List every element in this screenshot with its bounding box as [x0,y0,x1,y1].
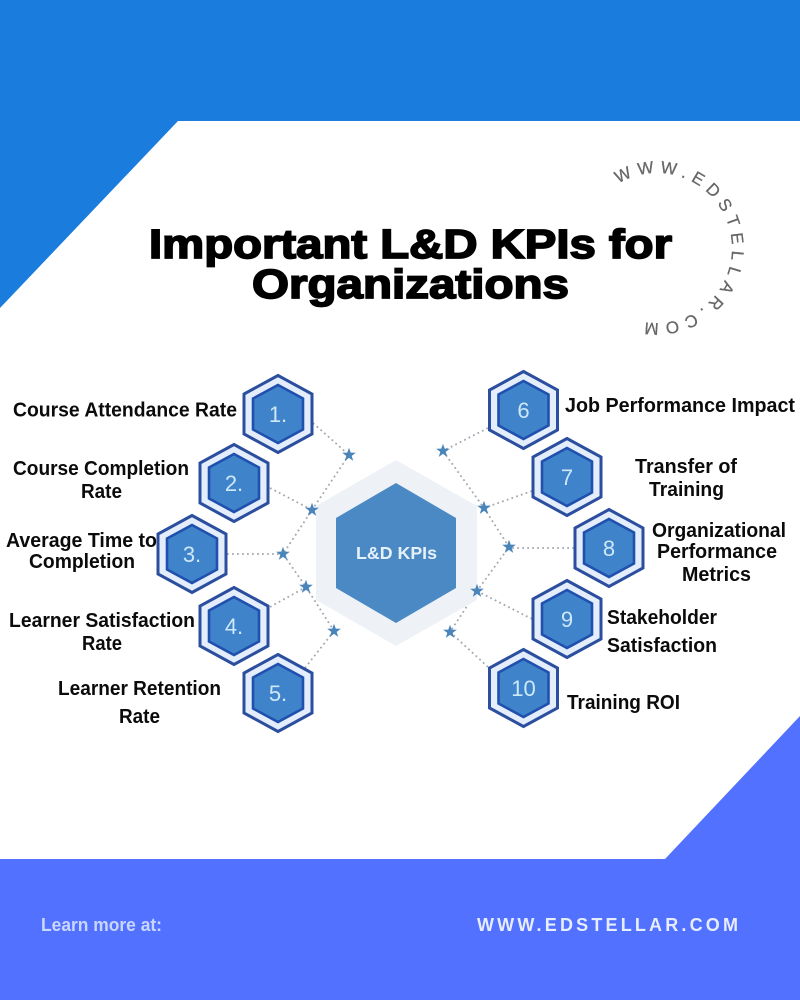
KPI 6: Job Performance Impact: Job Performance Impact [565,395,795,417]
KPI 7: Transfer of Training: Transfer of [635,456,737,478]
central hexagon: L&D KPIs [316,460,477,646]
KPI 7: Transfer of Training: 7 [561,465,573,490]
KPI 4: Learner Satisfaction Rate [9,588,268,664]
star markers [276,444,516,638]
central hexagon: L&D KPIs: L&D KPIs [356,543,437,563]
KPI 9: Stakeholder Satisfaction: 9 [561,607,573,632]
title [149,221,672,307]
KPI 1: Course Attendance Rate: Course Attendance Rate [13,400,237,422]
KPI 1: Course Attendance Rate: 1. [269,402,287,427]
KPI 9: Stakeholder Satisfaction: Satisfaction [607,635,717,657]
KPI 8: Organizational Performance Metrics: Metrics [682,564,751,586]
KPI 10: Training ROI: 10 [511,676,536,701]
KPI 5: Learner Retention Rate: Learner Retention [58,678,221,700]
KPI 8: Organizational Performance Metrics: Performance [657,541,777,563]
footer: website: WWW.EDSTELLAR.COM [477,915,738,935]
KPI 10: Training ROI: Training ROI [567,692,680,714]
circular website text: WWW.EDSTELLAR.COM [613,160,744,336]
KPI 6: Job Performance Impact [490,372,795,448]
KPI 2: Course Completion Rate: Rate [81,481,122,503]
KPI 8: Organizational Performance Metrics: 8 [603,536,615,561]
KPI 4: Learner Satisfaction Rate: Rate [82,633,122,655]
KPI 5: Learner Retention Rate: 5. [269,681,287,706]
footer: learn more: Learn more at: [41,915,162,935]
bottom blue banner [0,716,800,1000]
KPI 3: Average Time to Completion: Average Time to [6,530,157,552]
KPI 8: Organizational Performance Metrics [575,510,786,586]
top blue banner [0,0,800,308]
title: Important L&D KPIs for [149,221,672,267]
KPI 1: Course Attendance Rate [13,376,312,452]
title: Organizations [252,261,569,307]
KPI 3: Average Time to Completion: 3. [183,542,201,567]
KPI 10: Training ROI [490,650,680,726]
KPI 9: Stakeholder Satisfaction [533,580,717,658]
dotted connectors [227,423,574,668]
KPI 3: Average Time to Completion: Completion [29,551,135,573]
KPI 2: Course Completion Rate [13,444,268,522]
KPI 4: Learner Satisfaction Rate: 4. [225,614,243,639]
KPI 6: Job Performance Impact: 6 [517,398,530,423]
KPI 2: Course Completion Rate: 2. [225,471,243,496]
KPI 5: Learner Retention Rate [58,654,312,732]
KPI 5: Learner Retention Rate: Rate [119,706,160,728]
KPI 7: Transfer of Training [533,438,737,516]
KPI 9: Stakeholder Satisfaction: Stakeholder [607,607,717,629]
KPI 2: Course Completion Rate: Course Completion [13,458,189,480]
KPI 7: Transfer of Training: Training [649,479,724,501]
KPI 4: Learner Satisfaction Rate: Learner Satisfaction [9,610,195,632]
KPI 3: Average Time to Completion [6,516,226,592]
KPI 8: Organizational Performance Metrics: Organizational [652,520,786,542]
